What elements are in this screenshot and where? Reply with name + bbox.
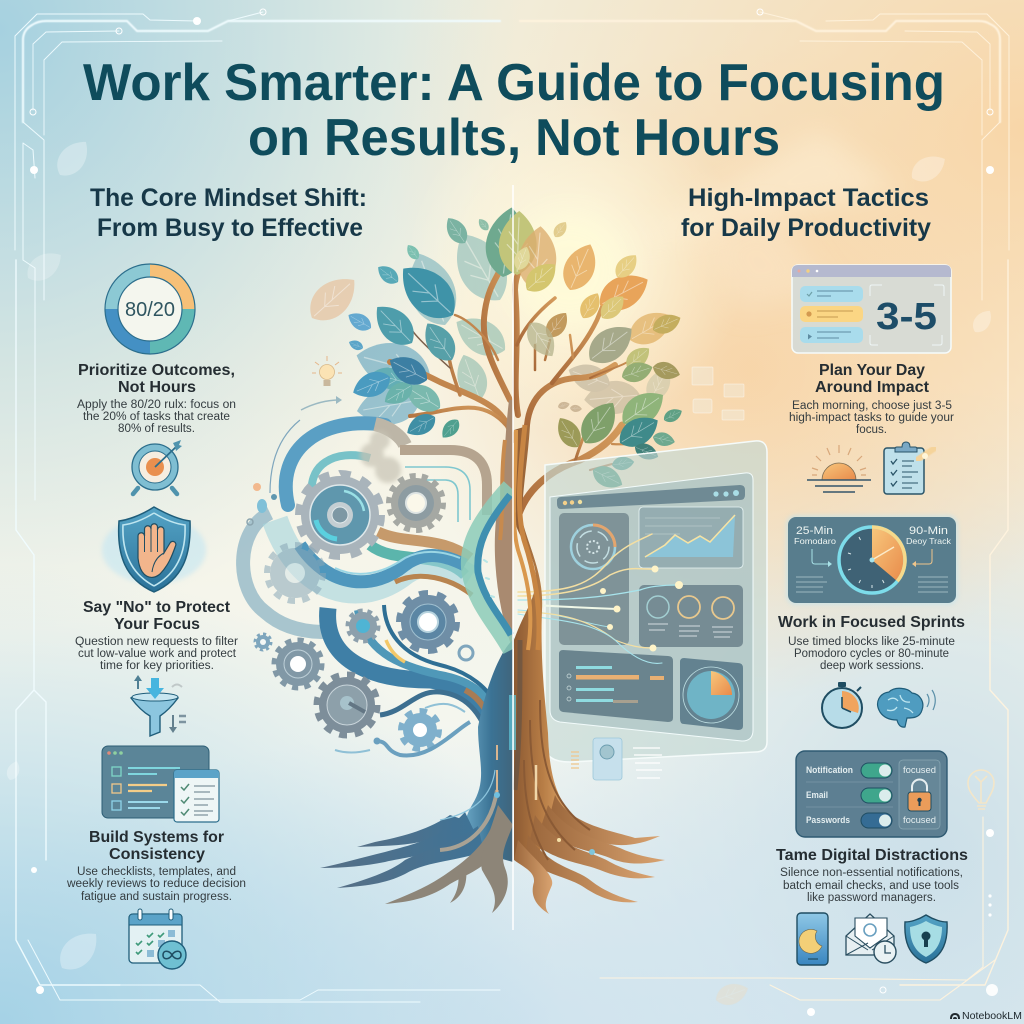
gear bottom (317, 675, 377, 735)
icon: shield with hand (102, 507, 206, 592)
section heading: mindset shift (90, 184, 367, 242)
icon: funnel (131, 675, 186, 736)
text: tame description: Silence non-essential notifications, (780, 867, 963, 879)
item: say no (66, 507, 246, 969)
left leaves (345, 205, 532, 442)
icon: notification toggle panel (796, 751, 947, 837)
heading: tame: Tame Digital Distractions (776, 847, 968, 864)
icon: 80/20 ring: 80/20 (125, 299, 175, 321)
text: tame description: like password managers. (807, 892, 936, 904)
section heading: tactics: High-Impact Tactics (688, 184, 929, 212)
item: prioritize outcomes (77, 264, 236, 494)
text: say no description (75, 636, 238, 672)
heading: say no: Your Focus (114, 616, 200, 633)
gears and digital ribbons (243, 420, 503, 770)
icon: notification toggle panel: Passwords (806, 815, 850, 825)
section heading: tactics (681, 184, 931, 242)
heading: sprints: Work in Focused Sprints (778, 614, 965, 631)
icon: notification toggle panel: Notification (806, 765, 853, 775)
gear faded (267, 545, 323, 601)
dashboard progress rings (639, 585, 743, 647)
heading: build systems: Consistency (109, 846, 205, 863)
icon: clipboard with pencil (884, 442, 935, 494)
icon: brain (878, 688, 935, 727)
heading: say no (83, 599, 230, 633)
dashboard bars card (559, 650, 673, 722)
icon: calendar with infinity (129, 909, 186, 969)
icon: sprint timer panel: 90-Min (909, 525, 948, 537)
section heading: mindset shift: The Core Mindset Shift: (90, 184, 367, 212)
text: plan description: Each morning, choose just 3-5 (792, 400, 952, 412)
back foliage right (564, 304, 679, 417)
title: Work Smarter: A Guide to Focusing (83, 54, 945, 112)
right roots (550, 795, 660, 845)
dashboard line chart (639, 507, 743, 568)
panel: right column (776, 265, 994, 965)
text: sprints description: deep work sessions. (820, 660, 924, 672)
icon: lightbulb outline (968, 770, 994, 809)
gear medium (399, 593, 457, 651)
lower trunk mass (464, 640, 513, 862)
tree branches left (390, 272, 513, 440)
heading: plan (815, 362, 929, 396)
heading: prioritize (78, 362, 235, 396)
text: prioritize description: Apply the 80/20 rulx: focus on (77, 399, 236, 411)
text: build systems description: fatigue and sustain progress. (81, 891, 232, 903)
small card below panel (571, 738, 662, 780)
icon: 3-5 task window (792, 265, 951, 353)
text: build systems description: weekly reviews to reduce decision (66, 878, 246, 890)
item: plan your day (789, 265, 954, 494)
centre divider line (512, 185, 514, 930)
text: plan description: high-impact tasks to guide your (789, 412, 954, 424)
tree branches right (515, 260, 645, 520)
dashboard title bar (557, 485, 745, 509)
gear tiny (255, 634, 271, 650)
heading: prioritize: Not Hours (118, 379, 196, 396)
floating mini cards (692, 367, 744, 420)
item: tame digital distractions (776, 751, 994, 965)
gear top large (299, 474, 381, 556)
gear small centre (348, 610, 378, 642)
text: say no description: cut low-value work and protect (78, 648, 237, 660)
heading: build systems: Build Systems for (89, 829, 224, 846)
central tree: gears and digital dashboard (243, 185, 767, 930)
heading: plan: Around Impact (815, 379, 929, 396)
title: on Results, Not Hours (248, 109, 780, 167)
text: tame description (780, 867, 963, 904)
text: say no description: time for key priorities. (100, 660, 214, 672)
dashboard pie card (680, 658, 743, 730)
panel: left column (66, 264, 246, 969)
icon: envelope with clock (846, 914, 896, 963)
ornaments (247, 420, 473, 660)
heading: prioritize: Prioritize Outcomes, (78, 362, 235, 379)
glowing data streams (518, 534, 683, 663)
icon: sprint timer panel (786, 515, 958, 605)
left roots (357, 815, 470, 847)
curved blue-green ribbon (469, 487, 511, 650)
icon: shield with keyhole (905, 915, 947, 963)
icon: sprint timer panel: 25-Min (796, 525, 833, 537)
text: say no description: Question new requests to filter (75, 636, 238, 648)
text: sprints description: Use timed blocks like 25-minute (788, 636, 955, 648)
tree trunk right half with roots (509, 425, 665, 914)
item: focused sprints (778, 515, 965, 728)
gear lower left (274, 640, 322, 688)
icon: 80/20 ring (105, 264, 195, 354)
icon: target with arrow (132, 440, 182, 494)
upper brown strand behind ribbon (495, 400, 513, 650)
section heading: mindset shift: From Busy to Effective (97, 214, 363, 242)
icon: stopwatch (822, 682, 862, 728)
icon: sprint timer panel: Fomodaro (794, 536, 836, 546)
text: plan description: focus. (856, 424, 887, 436)
dashboard panel (518, 441, 767, 780)
icon: notification toggle panel: focused (903, 765, 936, 775)
heading: say no: Say "No" to Protect (83, 599, 230, 616)
heading: plan: Plan Your Day (819, 362, 925, 379)
text: prioritize description (77, 399, 236, 435)
icon: browser checklist (102, 746, 219, 822)
gear blue faded with tail (335, 704, 470, 756)
right leaves (498, 210, 684, 493)
tan leaf and lightbulb doodles (301, 267, 365, 410)
ribbons (243, 423, 503, 770)
icon: notification toggle panel: Email (806, 790, 828, 800)
text: tame description: batch email checks, and use tools (783, 880, 959, 892)
section heading: tactics: for Daily Productivity (681, 214, 931, 242)
text: sprints description: Pomodoro cycles or 80-minute (794, 648, 949, 660)
title (83, 54, 945, 167)
text: build systems description: Use checklists, templates, and (77, 866, 236, 878)
icon: sunrise (807, 445, 871, 492)
tree trunk left half with roots (320, 400, 513, 913)
icon: phone with moon (797, 913, 828, 965)
icon: 3-5 task window: 3-5 (876, 296, 937, 338)
icon: notification toggle panel: focused (903, 815, 936, 825)
dashboard donut card (559, 513, 629, 645)
sun glow and beams (515, 130, 900, 325)
back foliage left (351, 223, 519, 430)
text: build systems description (66, 866, 246, 903)
gear top second (389, 476, 443, 530)
text: prioritize description: 80% of results. (118, 423, 195, 435)
heading: build systems (89, 829, 224, 863)
NotebookLM watermark: NotebookLM (962, 1011, 1022, 1022)
text: plan description (789, 400, 954, 436)
text: sprints description (788, 636, 955, 672)
icon: sprint timer panel: Deoy Track (906, 536, 952, 546)
text: prioritize description: the 20% of tasks that create (83, 411, 230, 423)
smoke blur (360, 430, 401, 483)
